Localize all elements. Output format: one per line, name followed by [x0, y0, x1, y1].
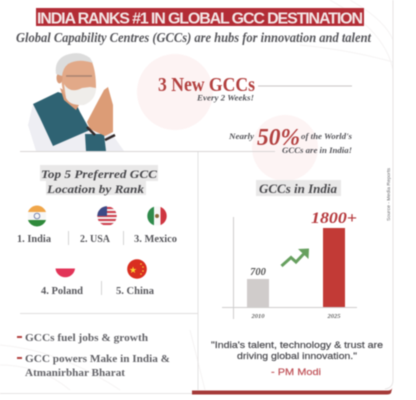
location labels: 2. USA [80, 234, 111, 245]
ear [56, 72, 62, 84]
stat: 3 new GCCs [158, 74, 352, 102]
icon: USA flag [97, 206, 117, 226]
hands [87, 87, 113, 136]
chart axes [222, 217, 357, 319]
icon: Poland flag [56, 268, 75, 277]
subtitle: Global Capability Centres (GCCs) are hubs for innovation and talent [16, 30, 372, 45]
quote: driving global innovation." [237, 351, 357, 361]
panel heading: Top 5 Preferred GCC [41, 167, 158, 181]
neck [60, 88, 82, 110]
bar: 2010: 700 [250, 267, 267, 278]
panel: GCCs in India chart [222, 180, 357, 320]
bar: 2025: 1800+ [311, 210, 357, 227]
quote [211, 340, 383, 378]
location labels: 5. China [116, 286, 154, 297]
icon: China flag: ★ [129, 265, 137, 275]
quote: - PM Modi [271, 367, 321, 378]
pink circle: new GCCs [137, 54, 213, 130]
face [61, 60, 96, 104]
bar: 2025: 2025 [326, 313, 341, 320]
vest [33, 92, 90, 146]
bar: 2025 [311, 210, 357, 320]
panel: key points: GCC powers Make in India & [25, 353, 170, 365]
stat: 3 new GCCs: 3 New GCCs [158, 74, 255, 96]
panel heading: Location by Rank [46, 182, 144, 196]
location labels [17, 234, 177, 297]
bottom red bar [192, 387, 392, 394]
stat: nearly 50% [228, 125, 352, 155]
icon: India flag [28, 206, 46, 226]
icon: green growth arrow [282, 248, 309, 266]
panel: key points: GCCs fuel jobs & growth [25, 332, 148, 344]
icon: China flag [127, 259, 147, 279]
kurta [28, 104, 124, 151]
location labels: 1. India [17, 234, 51, 245]
panel: top 5 locations [17, 165, 177, 297]
glasses [66, 75, 92, 77]
portrait of PM Modi [28, 53, 124, 151]
stat: 3 new GCCs: Every 2 Weeks! [196, 94, 254, 102]
hair [56, 53, 93, 76]
panel: key points: Atmanirbhar Bharat [25, 367, 125, 379]
bar: 2010: 2010 [250, 313, 265, 320]
bar: 2010 [247, 267, 269, 320]
location labels: 4. Poland [41, 286, 83, 297]
panel heading [40, 165, 158, 196]
panel: key points [17, 332, 170, 379]
pink circle: share [252, 115, 318, 181]
source note: Source - Media Reports [386, 167, 392, 221]
stat: nearly 50%: of the World's [301, 132, 352, 141]
location labels: 3. Mexico [134, 234, 177, 245]
quote: "India's talent, technology & trust are [211, 340, 383, 350]
stat: nearly 50%: 50% [257, 125, 300, 151]
chart heading: GCCs in India [259, 181, 337, 196]
stat: nearly 50%: GCCs are in India! [282, 146, 352, 155]
title banner: INDIA RANKS #1 IN GLOBAL GCC DESTINATION [37, 10, 363, 28]
beard [64, 84, 96, 105]
stat: nearly 50%: Nearly [228, 132, 255, 141]
icon: Mexico flag [147, 206, 168, 226]
